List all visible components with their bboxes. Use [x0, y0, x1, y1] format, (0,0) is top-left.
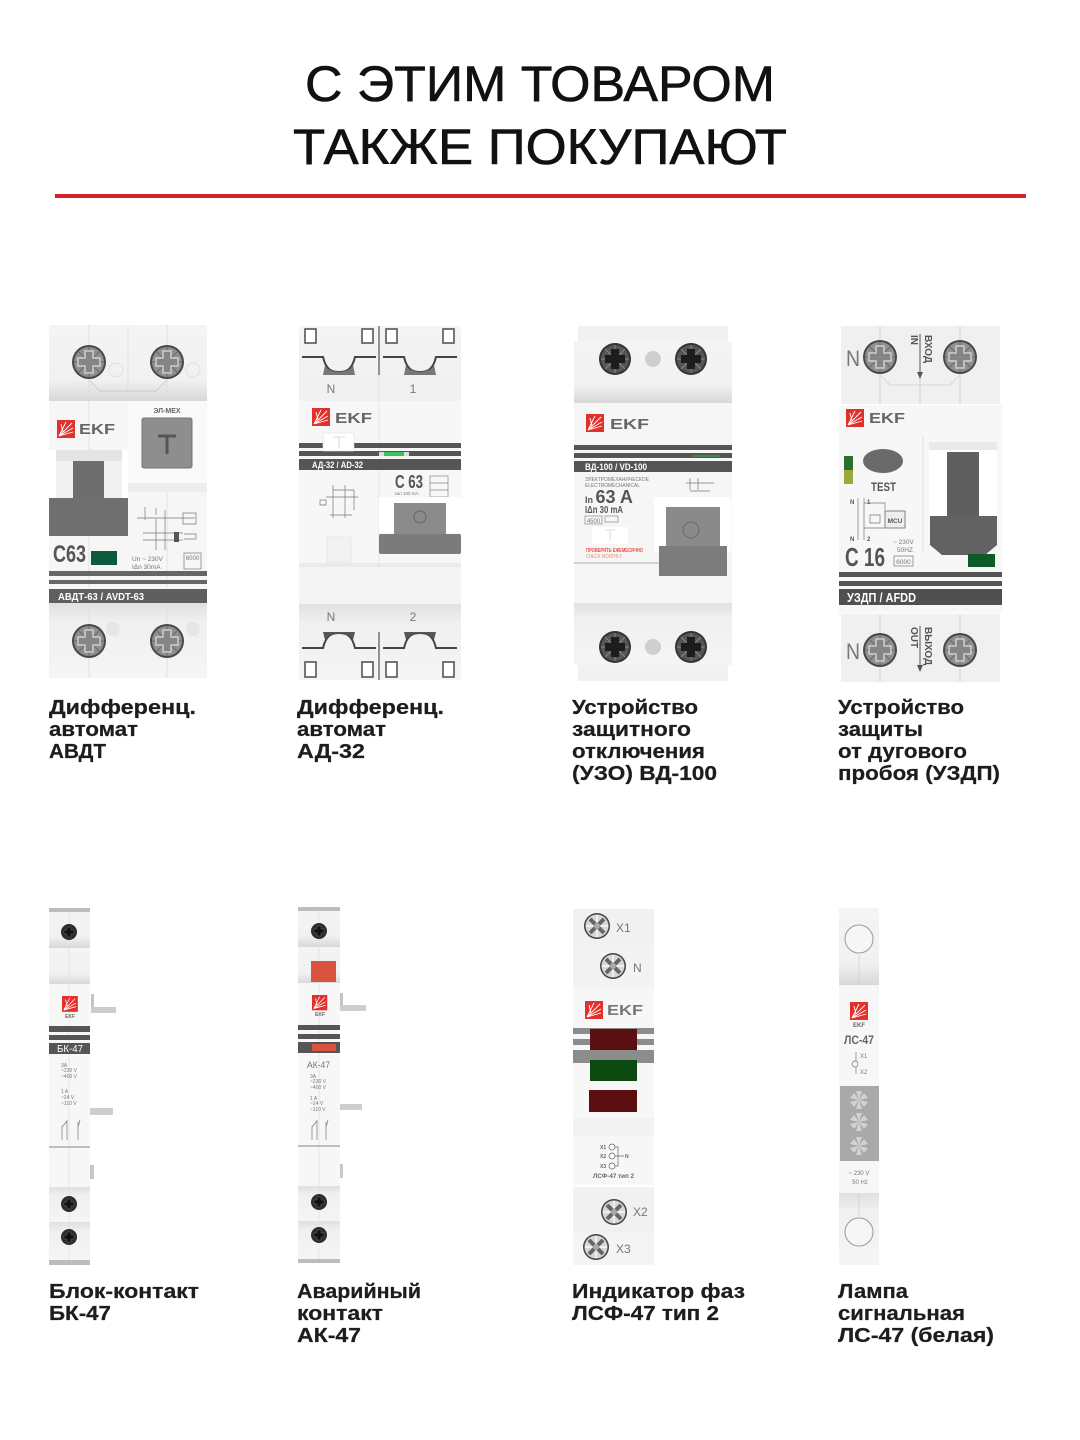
product: УЗДП AFDD: 6000 — [896, 559, 911, 566]
product: УЗДП AFDD: ВХОД — [922, 335, 933, 363]
product: АВДТ breaker: Un ~ 230V — [132, 556, 164, 563]
product: АК-47: ~110 V — [310, 1107, 326, 1113]
label: ЛС-47: Лампа — [838, 1280, 909, 1303]
product: АВДТ breaker: C63 — [53, 541, 86, 568]
product: УЗДП AFDD: EKF — [869, 410, 905, 427]
product: ВД-100 RCD: 4500 — [587, 519, 601, 525]
product: ЛСФ-47 тип 2: X1 — [616, 921, 631, 935]
product: АД-32 breaker: C 63 — [395, 472, 423, 492]
label: УЗДП — [838, 696, 1000, 785]
product: ВД-100 RCD: In 63 A — [585, 487, 633, 507]
product: УЗДП AFDD: MCU — [888, 518, 903, 525]
product: АД-32 breaker: 2 — [410, 610, 417, 624]
label: УЗДП: защиты — [838, 718, 923, 741]
label: ЛСФ-47: ЛСФ-47 тип 2 — [572, 1302, 719, 1325]
label: УЗДП: от дугового — [838, 740, 967, 763]
product: БК-47: ~230 V — [61, 1068, 78, 1074]
label: АВДТ — [49, 696, 196, 763]
label: АВДТ: автомат — [49, 718, 138, 741]
product: АВДТ breaker — [49, 325, 207, 678]
product: ЛСФ-47 тип 2: X2 — [633, 1205, 648, 1219]
product: УЗДП AFDD: ВЫХОД — [922, 627, 933, 665]
product: БК-47: ~24 V — [61, 1095, 75, 1101]
product: ВД-100 RCD: ЭЛЕКТРОМЕХАНИЧЕСКОЕ — [585, 477, 649, 483]
label: БК-47 — [49, 1280, 199, 1325]
label: АК-47: Аварийный — [297, 1280, 421, 1303]
product: УЗДП AFDD: N — [846, 346, 860, 371]
product: АД-32 breaker: 1 — [410, 382, 417, 396]
product: БК-47: 1 A — [61, 1089, 69, 1095]
product: ЛСФ-47 тип 2: X3 — [616, 1242, 631, 1256]
product: ЛСФ-47 тип 2 — [573, 909, 654, 1265]
label: ВД-100: (УЗО) ВД-100 — [572, 762, 717, 785]
product: БК-47: БК-47 — [57, 1044, 83, 1055]
product: УЗДП AFDD: OUT — [908, 627, 919, 648]
product: АД-32 breaker: EKF — [335, 410, 372, 427]
product: АК-47: 3A — [310, 1074, 317, 1080]
product: БК-47: ~110 V — [61, 1101, 77, 1107]
product: АВДТ breaker: АВДТ-63 / AVDT-63 — [58, 592, 144, 603]
product: ВД-100 RCD: ВД-100 / VD-100 — [585, 462, 647, 472]
product: ЛСФ-47 тип 2: X1 — [600, 1145, 606, 1151]
product: АК-47: ~400 V — [310, 1085, 327, 1091]
product: АД-32 breaker: IΔn 100 mA — [395, 491, 419, 496]
product: ЛСФ-47 тип 2: EKF — [607, 1002, 643, 1019]
label: АК-47: контакт — [297, 1302, 383, 1325]
product: УЗДП AFDD: 50HZ — [897, 547, 913, 554]
product: АВДТ breaker: 6000 — [186, 556, 200, 562]
label: АД-32: автомат — [297, 718, 386, 741]
product: УЗДП AFDD: N — [846, 639, 860, 664]
product: БК-47: 3A — [61, 1063, 68, 1069]
label: ЛСФ-47: Индикатор фаз — [572, 1280, 745, 1303]
product: БК-47: ~400 V — [61, 1074, 78, 1080]
product: ЛСФ-47 тип 2: N — [625, 1154, 629, 1160]
label: ЛС-47: сигнальная — [838, 1302, 965, 1325]
product: ЛС-47 white lamp: X2 — [860, 1070, 868, 1076]
product: АВДТ breaker: IΔn 30mA — [132, 564, 161, 571]
label: ЛСФ-47 — [572, 1280, 745, 1325]
product: АД-32 breaker: N — [327, 610, 335, 624]
product: АК-47: АК-47 — [307, 1060, 330, 1070]
product: ЛС-47 white lamp: ~ 230 V — [849, 1171, 869, 1177]
label: ВД-100 — [572, 696, 717, 785]
label: АВДТ: Дифференц. — [49, 696, 196, 719]
product: УЗДП AFDD: УЗДП / AFDD — [847, 590, 916, 605]
product: АД-32 breaker: АД-32 / AD-32 — [312, 460, 363, 470]
product: УЗДП AFDD: 1 — [867, 500, 871, 506]
label: ЛС-47: ЛС-47 (белая) — [838, 1324, 994, 1347]
label: АК-47 — [297, 1280, 421, 1347]
product: ВД-100 RCD — [574, 326, 732, 681]
product: ЛС-47 white lamp: 50 Hz — [852, 1180, 868, 1186]
product: ВД-100 RCD: ПРОВЕРЯТЬ ЕЖЕМЕСЯЧНО — [586, 548, 643, 554]
product: ВД-100 RCD: ELECTROMECHANICAL — [585, 483, 640, 489]
label: АД-32: АД-32 — [297, 740, 365, 763]
label: ВД-100: Устройство — [572, 696, 698, 719]
label: ВД-100: защитного — [572, 718, 691, 741]
product: ВД-100 RCD: EKF — [610, 416, 649, 433]
product: АД-32 breaker: N — [327, 382, 335, 396]
title: ТАКЖЕ ПОКУПАЮТ — [293, 119, 787, 175]
label: ВД-100: отключения — [572, 740, 705, 763]
product: АК-47: 1 A — [310, 1096, 318, 1102]
product: УЗДП AFDD: ~ 230V — [893, 539, 914, 546]
product: УЗДП AFDD: TEST — [871, 480, 897, 494]
label: АД-32 — [297, 696, 444, 763]
product: ЛС-47 white lamp: EKF — [853, 1023, 865, 1029]
product: ВД-100 RCD: IΔn 30 mA — [585, 505, 623, 516]
product: АВДТ breaker: ЭЛ-МЕХ — [153, 408, 181, 415]
label: БК-47: БК-47 — [49, 1302, 111, 1325]
product: ЛС-47 white lamp: X1 — [860, 1054, 868, 1060]
product: ЛСФ-47 тип 2: X3 — [600, 1164, 606, 1170]
product: АК-47: ~24 V — [310, 1101, 324, 1107]
product: ЛС-47 white lamp: ЛС-47 — [844, 1033, 874, 1047]
title — [293, 56, 787, 175]
product: ЛС-47 white lamp — [839, 908, 879, 1265]
label: ЛС-47 — [838, 1280, 994, 1347]
product: УЗДП AFDD: 2 — [867, 537, 871, 543]
product: АД-32 breaker — [299, 326, 461, 680]
product: АК-47 — [298, 907, 366, 1263]
label: АК-47: АК-47 — [297, 1324, 361, 1347]
product: ЛСФ-47 тип 2: N — [633, 961, 642, 975]
product: АВДТ breaker: EKF — [79, 421, 115, 438]
product: ЛСФ-47 тип 2: X2 — [600, 1154, 606, 1160]
product: УЗДП AFDD: C 16 — [845, 542, 885, 572]
title: С ЭТИМ ТОВАРОМ — [305, 56, 775, 112]
product: УЗДП AFDD — [839, 326, 1002, 682]
red divider — [55, 194, 1026, 198]
product: АК-47: ~230 V — [310, 1079, 327, 1085]
product: БК-47 — [49, 908, 116, 1265]
product: УЗДП AFDD: IN — [908, 335, 919, 345]
label: УЗДП: пробоя (УЗДП) — [838, 762, 1000, 785]
product: ЛСФ-47 тип 2: ЛСФ-47 тип 2 — [593, 1174, 635, 1180]
product: УЗДП AFDD: N — [850, 537, 854, 543]
product: УЗДП AFDD: N — [850, 500, 854, 506]
label: АД-32: Дифференц. — [297, 696, 444, 719]
label: УЗДП: Устройство — [838, 696, 964, 719]
label: АВДТ: АВДТ — [49, 740, 106, 763]
product: АК-47: EKF — [315, 1012, 325, 1018]
label: БК-47: Блок-контакт — [49, 1280, 199, 1303]
product: ВД-100 RCD: CHECK MONTHLY — [586, 554, 623, 560]
product: БК-47: EKF — [65, 1014, 75, 1020]
